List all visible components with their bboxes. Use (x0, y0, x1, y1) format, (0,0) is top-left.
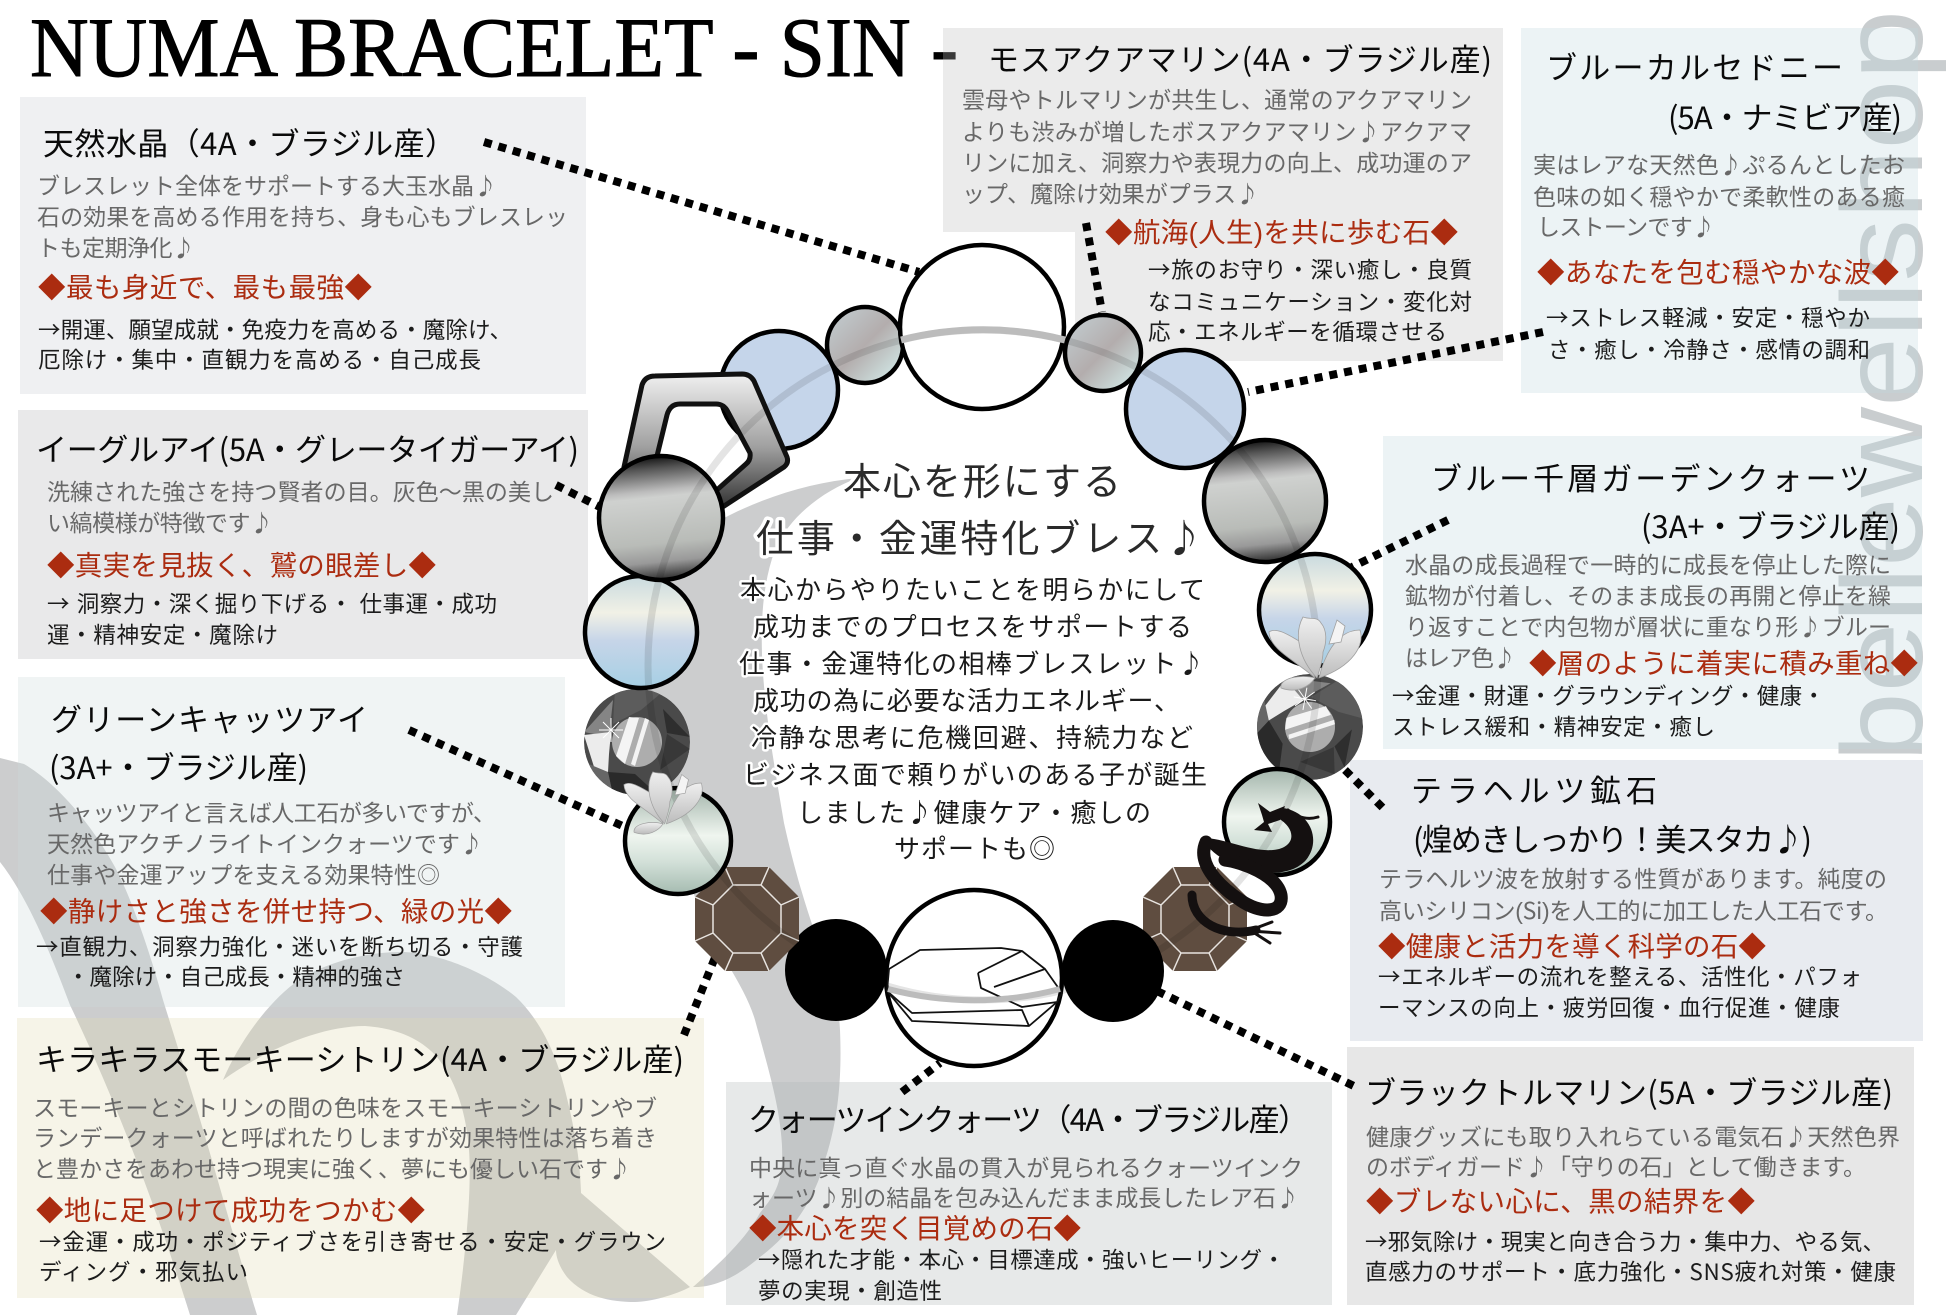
bead: left black tourmaline (785, 919, 887, 1021)
panel: moss aquamarine: モスアクアマリン(4A・ブラジル産) (988, 35, 1492, 80)
panel: natural quartz: トも定期浄化♪ (37, 229, 195, 263)
panel: quartz in quartz: →隠れた才能・本心・目標達成・強いヒーリング・ (758, 1243, 1285, 1275)
panel: blue chalcedony: 実はレアな天然色♪ぷるんとしたお (1533, 146, 1905, 180)
panel: moss aquamarine: 雲母やトルマリンが共生し、通常のアクアマリン (962, 87, 1472, 113)
panel: green cat's eye: ・魔除け・自己成長・精神的強さ (67, 965, 405, 990)
panel: sparkling smoky citrine: →金運・成功・ポジティブさを引き寄せる・安定・グラウン (39, 1225, 666, 1257)
panel: blue layered garden quartz: ブルー千層ガーデンクォーツ (1431, 454, 1870, 499)
panel: terahertz: (煌めきしっかり！美スタカ♪) (1413, 815, 1812, 860)
panel: moss aquamarine (943, 28, 1503, 361)
panel: sparkling smoky citrine: ◆地に足つけて成功をつかむ◆ (36, 1195, 426, 1226)
bead: right layered quartz (1259, 554, 1371, 666)
panel: blue chalcedony: さ・癒し・冷静さ・感情の調和 (1548, 338, 1870, 363)
panel: terahertz (1350, 760, 1923, 1041)
bead: right blue chalcedony (1126, 350, 1244, 468)
panel: blue chalcedony: 色味の如く穏やかで柔軟性のある癒 (1533, 184, 1905, 210)
panel: eagle eye (18, 410, 588, 659)
panel: blue layered garden quartz: 水晶の成長過程で一時的に成長を停止した際に (1405, 552, 1891, 578)
panel: sparkling smoky citrine: ディング・邪気払い (39, 1260, 248, 1285)
bead: right terahertz faceted (1236, 653, 1384, 801)
background watermark swooshes (0, 478, 858, 1315)
title: NUMA BRACELET - SIN - (30, 1, 958, 95)
center text block: サポートも◎ (894, 829, 1055, 866)
panel: blue layered garden quartz: はレア色♪ (1405, 639, 1516, 673)
bead: left eagle eye (599, 456, 723, 580)
panel: green cat's eye: 天然色アクチノライトインクォーツです♪ (47, 825, 483, 859)
panel: sparkling smoky citrine: と豊かさをあわせ持つ現実に強く、夢にも優しい石です♪ (33, 1150, 631, 1184)
panel: moss aquamarine: よりも渋みが増したボスアクアマリン♪アクアマ (962, 113, 1472, 147)
bead: right eagle eye (1204, 440, 1326, 562)
panel: moss aquamarine: リンに加え、洞察力や表現力の向上、成功運のア (962, 150, 1472, 176)
panel: natural quartz: →開運、願望成就・免疫力を高める・魔除け、 (38, 313, 512, 345)
bracelet string ring (648, 330, 1318, 1000)
bracelet (584, 245, 1384, 1066)
panel: eagle eye: い縞模様が特徴です♪ (47, 504, 273, 538)
panel: quartz in quartz: クォーツインクォーツ（4A・ブラジル産） (748, 1095, 1309, 1140)
panel: sparkling smoky citrine: キラキラスモーキーシトリン(4A・ブラジル産) (36, 1035, 684, 1080)
panel: black tourmaline: 直感力のサポート・底力強化・SNS疲れ対策・健康 (1365, 1255, 1896, 1287)
center text block: 冷静な思考に危機回避、持続力など (751, 718, 1193, 755)
panel: quartz in quartz (726, 1082, 1332, 1305)
icon: flower right (1269, 617, 1361, 690)
icon: flower left (624, 772, 702, 834)
panel: sparkling smoky citrine (17, 1018, 704, 1298)
center text block: ビジネス面で頼りがいのある子が誕生 (743, 755, 1207, 792)
panel: blue layered garden quartz: ◆層のように着実に積み重ね◆ (1529, 648, 1918, 679)
panel: terahertz: ーマンスの向上・疲労回復・血行促進・健康 (1378, 996, 1840, 1021)
panel: black tourmaline: のボディガード♪「守りの石」として働きます。 (1366, 1148, 1866, 1182)
panel: blue chalcedony: ◆あなたを包む穏やかな波◆ (1537, 257, 1900, 288)
bead: right black tourmaline (1062, 920, 1164, 1022)
pentagon charm (624, 374, 788, 520)
panel: blue layered garden quartz: り返すことで内包物が層状に重なり形♪ブルー (1405, 608, 1891, 642)
panel: eagle eye: 洗練された強さを持つ賢者の目。灰色〜黒の美し (47, 479, 554, 505)
bead: left green cat's eye (625, 788, 731, 894)
vertical watermark text: bellewellshop (1819, 10, 1946, 762)
panel: quartz in quartz: 夢の実現・創造性 (758, 1279, 942, 1304)
center text block: 仕事・金運特化の相棒ブレスレット♪ (739, 644, 1204, 681)
panel: blue chalcedony: ブルーカルセドニー (1546, 43, 1843, 88)
panel: quartz in quartz: ◆本心を突く目覚めの石◆ (749, 1213, 1082, 1244)
bead: left small moss aquamarine (827, 307, 903, 383)
panel: moss aquamarine: ップ、魔除け効果がプラス♪ (962, 175, 1259, 209)
icon: dragon (1192, 803, 1318, 943)
panel: moss aquamarine: →旅のお守り・深い癒し・良質 (1148, 253, 1472, 285)
panel: eagle eye: ◆真実を見抜く、鷲の眼差し◆ (47, 550, 436, 581)
center text block: 成功までのプロセスをサポートする (753, 607, 1192, 644)
panel: moss aquamarine: ◆航海(人生)を共に歩む石◆ (1105, 217, 1458, 248)
panel: quartz in quartz: ォーツ♪別の結晶を包み込んだまま成長したレア石♪ (749, 1179, 1299, 1213)
bead: left layered quartz (585, 576, 697, 688)
bead: left terahertz faceted (584, 689, 690, 795)
panel: blue chalcedony: しストーンです♪ (1537, 208, 1715, 242)
panel: green cat's eye: グリーンキャッツアイ (51, 695, 368, 740)
panel: blue layered garden quartz: →金運・財運・グラウンディング・健康・ (1392, 679, 1825, 711)
panel: black tourmaline: ブラックトルマリン(5A・ブラジル産) (1365, 1068, 1893, 1113)
center text block (739, 570, 1207, 866)
panel: black tourmaline: ◆ブレない心に、黒の結界を◆ (1366, 1186, 1756, 1217)
center heading: 本心を形にする (843, 451, 1121, 506)
panel: natural quartz (20, 97, 586, 394)
panel: eagle eye: → 洞察力・深く掘り下げる・ 仕事運・成功 (47, 587, 497, 619)
panel: blue chalcedony (1521, 28, 1918, 393)
panel: terahertz: →エネルギーの流れを整える、活性化・パフォ (1378, 960, 1862, 992)
center text block: しました♪健康ケア・癒しの (797, 793, 1151, 830)
panel: natural quartz: ブレスレット全体をサポートする大玉水晶♪ (37, 167, 497, 201)
panel: blue layered garden quartz: ストレス緩和・精神安定・癒し (1392, 715, 1715, 740)
panel: eagle eye: イーグルアイ(5A・グレータイガーアイ) (36, 425, 579, 470)
bead: left blue chalcedony (720, 331, 838, 449)
dotted leader lines (409, 142, 1543, 1092)
panel: sparkling smoky citrine: スモーキーとシトリンの間の色味をスモーキーシトリンやブ (33, 1095, 657, 1121)
panel: green cat's eye: (3A+・ブラジル産) (49, 743, 308, 788)
center heading: 仕事・金運特化ブレス♪ (756, 508, 1203, 563)
panel: moss aquamarine: 応・エネルギーを循環させる (1148, 320, 1447, 345)
bead: quartz in quartz (886, 890, 1062, 1066)
panel: natural quartz: ◆最も身近で、最も最強◆ (38, 272, 372, 303)
panel: moss aquamarine: なコミュニケーション・変化対 (1148, 290, 1472, 315)
panel: terahertz: ◆健康と活力を導く科学の石◆ (1378, 931, 1766, 962)
panel: natural quartz: 厄除け・集中・直観力を高める・自己成長 (38, 348, 481, 373)
panel: quartz in quartz: 中央に真っ直ぐ水晶の貫入が見られるクォーツインク (749, 1155, 1303, 1181)
panel: green cat's eye: 仕事や金運アップを支える効果特性◎ (47, 862, 440, 888)
panel: blue layered garden quartz: (3A+・ブラジル産) (1641, 502, 1900, 547)
panel: black tourmaline (1347, 1047, 1914, 1305)
panel: black tourmaline: →邪気除け・現実と向き合う力・集中力、やる気、 (1365, 1225, 1885, 1257)
bead: right small moss aquamarine (1065, 315, 1141, 391)
bead: right green cat's eye (1224, 769, 1330, 875)
panel: blue chalcedony: (5A・ナミビア産) (1668, 93, 1902, 138)
bead: left citrine octagon (695, 867, 799, 971)
bead: right citrine octagon (1143, 867, 1247, 971)
panel: eagle eye: 運・精神安定・魔除け (47, 623, 278, 648)
panel: terahertz: テラヘルツ波を放射する性質があります。純度の (1379, 866, 1887, 892)
panel: terahertz: 高いシリコン(Si)を人工的に加工した人工石です。 (1379, 892, 1888, 926)
panel: natural quartz: 石の効果を高める作用を持ち、身も心もブレスレッ (37, 204, 568, 230)
panel: green cat's eye: →直観力、洞察力強化・迷いを断ち切る・守護 (36, 930, 523, 962)
center text block: 本心からやりたいことを明らかにして (740, 570, 1205, 607)
panel: blue layered garden quartz: 鉱物が付着し、そのまま成長の再開と停止を繰 (1405, 583, 1891, 609)
panel: black tourmaline: 健康グッズにも取り入れらている電気石♪天然色界 (1366, 1118, 1900, 1152)
panel: blue chalcedony: →ストレス軽減・安定・穏やか (1546, 301, 1870, 333)
panel: green cat's eye (18, 677, 565, 1007)
panel: green cat's eye: ◆静けさと強さを併せ持つ、緑の光◆ (40, 896, 512, 927)
panel: natural quartz: 天然水晶（4A・ブラジル産） (43, 119, 456, 164)
panel: terahertz: テラヘルツ鉱石 (1411, 766, 1657, 811)
center text block: 成功の為に必要な活力エネルギー、 (753, 681, 1180, 718)
panel: blue layered garden quartz (1383, 436, 1922, 749)
panel: sparkling smoky citrine: ランデークォーツと呼ばれたりしますが効果特性は落ち着き (33, 1125, 657, 1151)
bead: large natural quartz top (900, 245, 1064, 409)
panel: green cat's eye: キャッツアイと言えば人工石が多いですが、 (47, 800, 496, 826)
center heading (756, 451, 1203, 563)
